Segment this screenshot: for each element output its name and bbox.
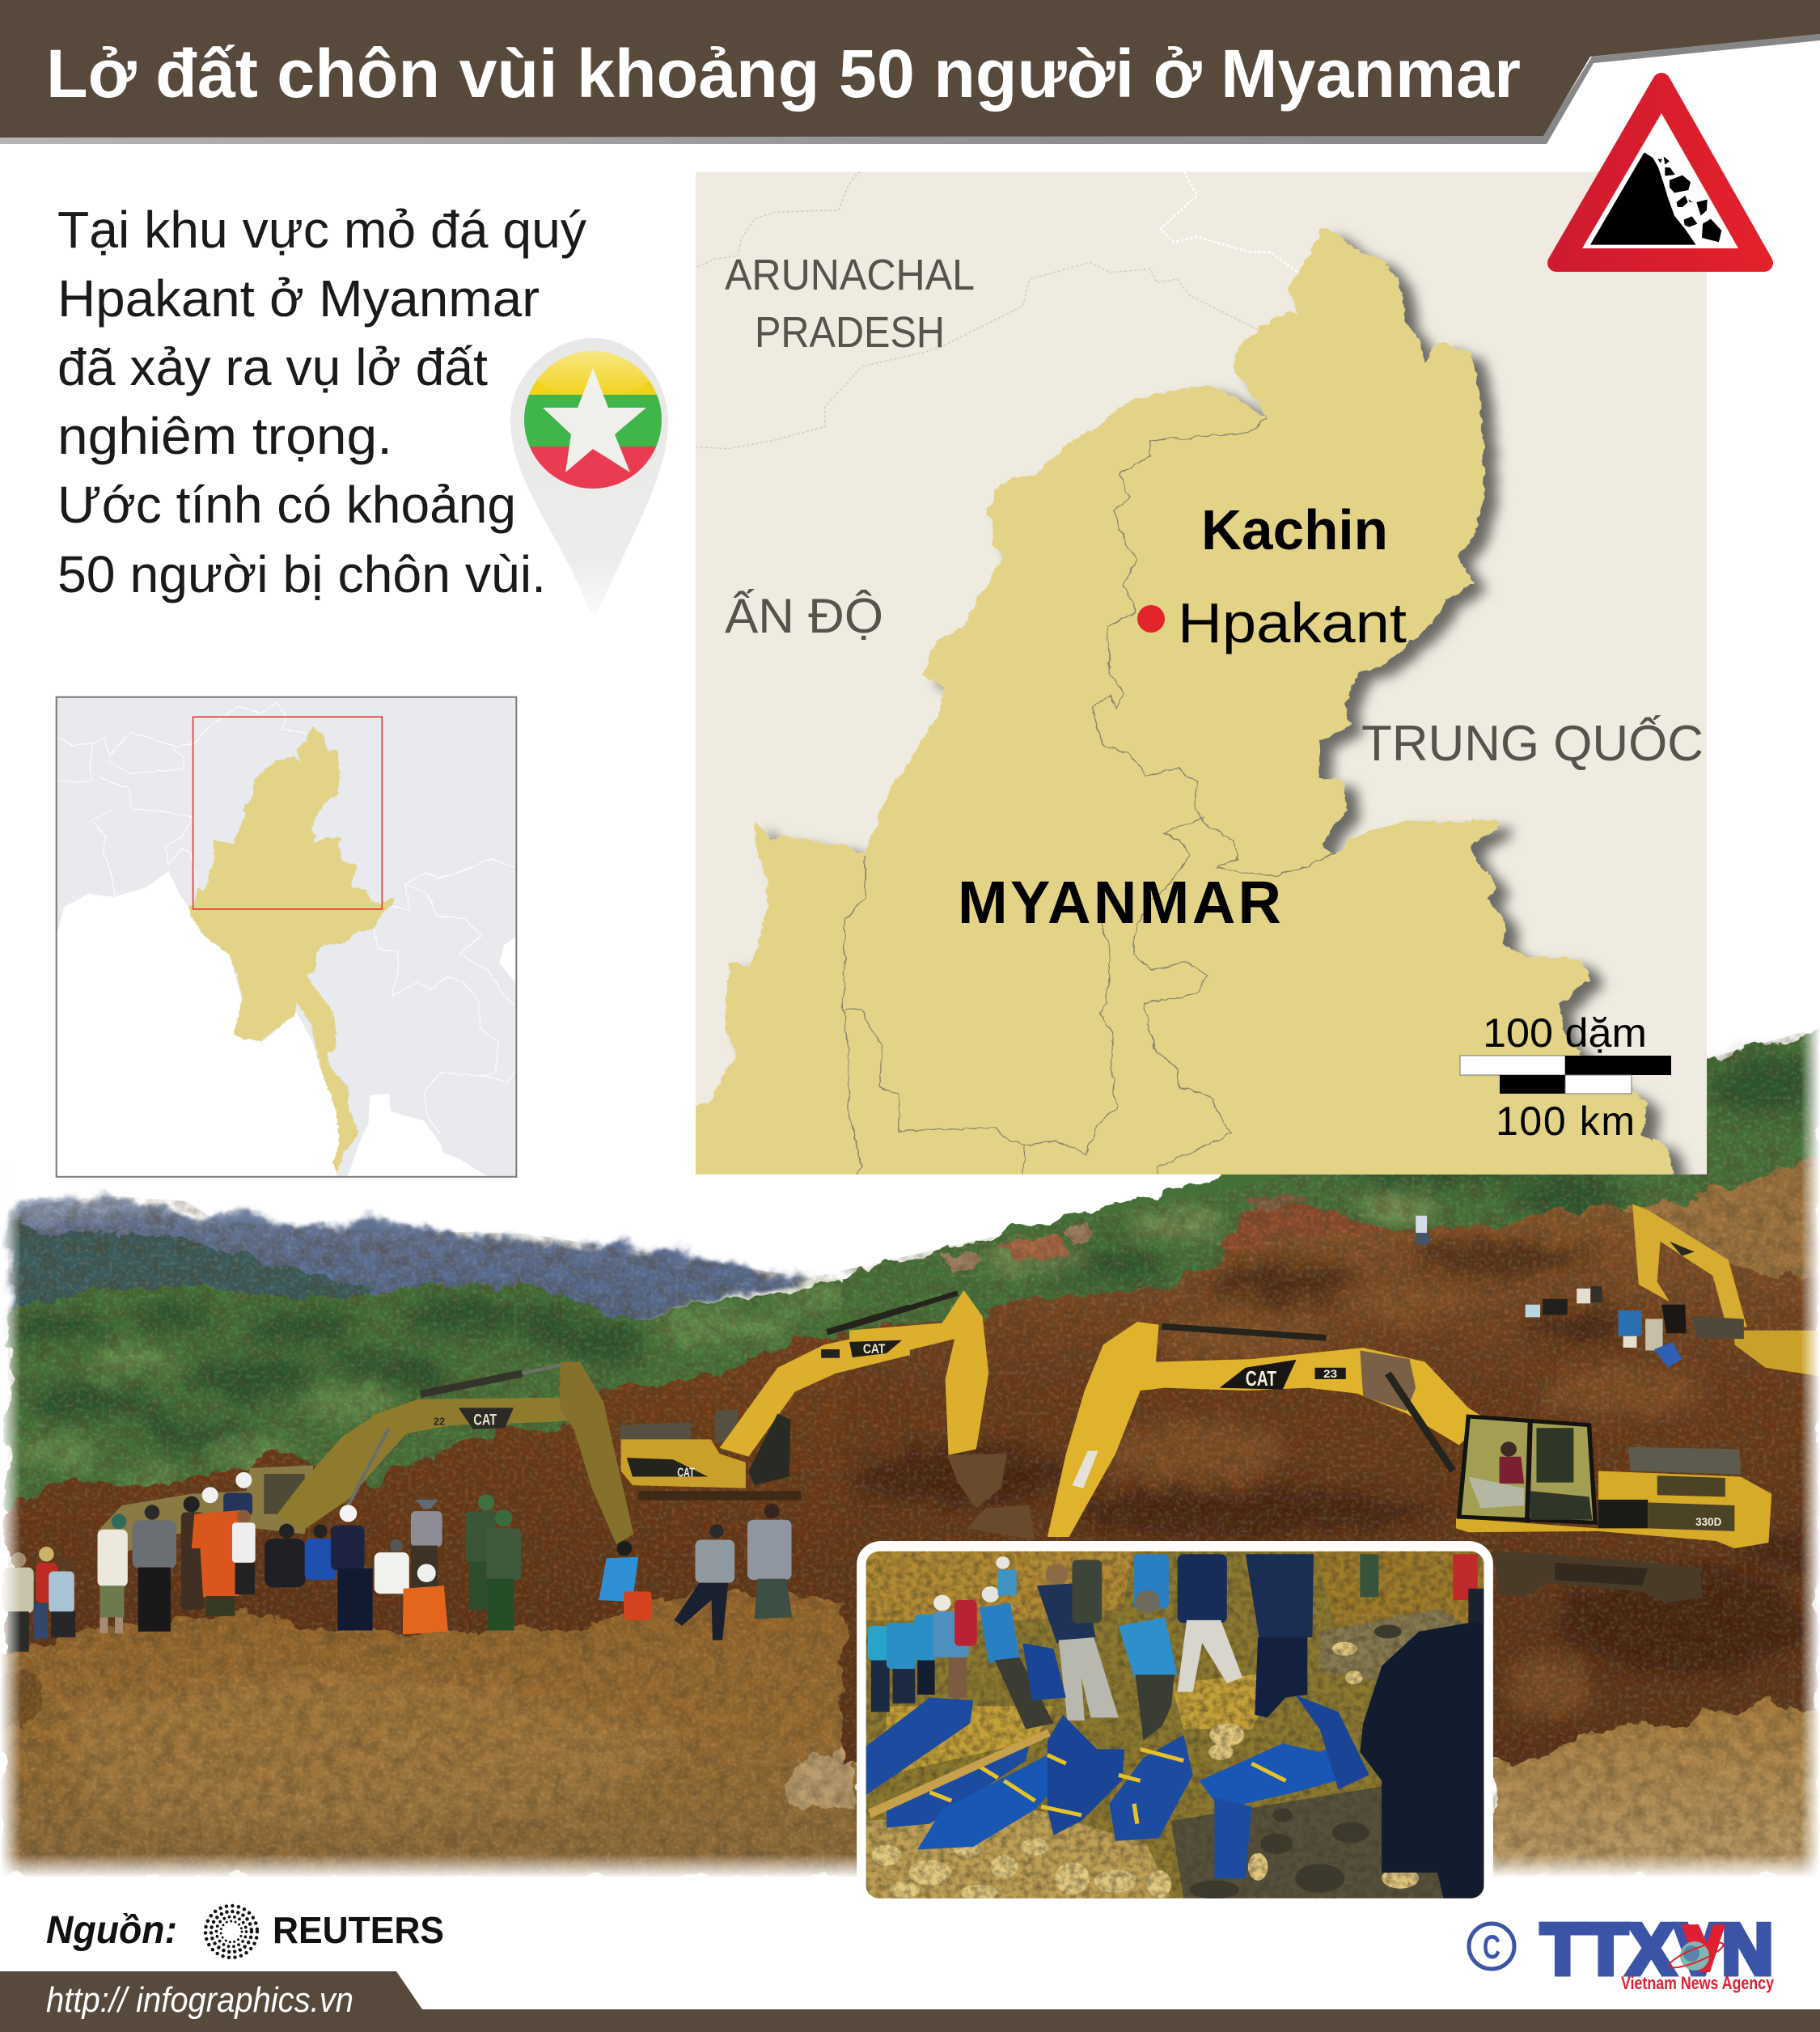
intro text block: Ước tính có khoảng bbox=[57, 476, 516, 534]
label: Kachin: Kachin bbox=[1201, 498, 1388, 561]
banner shadow bbox=[0, 34, 1820, 144]
label: Arunachal Pradesh: ARUNACHAL bbox=[725, 251, 975, 299]
inset texture bbox=[866, 1552, 1484, 1899]
neighbouring dashed borders bbox=[696, 171, 1297, 449]
scale bar: 100 dặm bbox=[1483, 1010, 1647, 1056]
scale bar bbox=[1460, 1010, 1671, 1144]
footer bar bbox=[0, 1971, 1820, 2032]
copyright symbol bbox=[1469, 1924, 1514, 1969]
scale bar: 100 km bbox=[1496, 1099, 1635, 1144]
photo terrain layers bbox=[0, 1029, 1820, 1878]
upper right soil bank bbox=[1617, 1155, 1820, 1322]
locator frame bbox=[57, 697, 516, 1177]
label: Ấn Độ: ẤN ĐỘ bbox=[725, 589, 883, 643]
inset man in foreground bbox=[1360, 1620, 1484, 1899]
label: Arunachal Pradesh: PRADESH bbox=[755, 308, 945, 357]
excavator: yellow middle machine: CAT bbox=[865, 1342, 885, 1356]
Myanmar landmass bbox=[681, 229, 1677, 1187]
locator land background bbox=[57, 698, 516, 1176]
excavator: large yellow CAT 330D: 23 bbox=[1323, 1368, 1337, 1381]
source line bbox=[46, 1906, 444, 1958]
locator borders bbox=[57, 702, 516, 1133]
excavator: far top right bbox=[1632, 1204, 1820, 1376]
region borders bbox=[843, 418, 1335, 1175]
excavator: olive left machine: CAT bbox=[473, 1412, 497, 1429]
copyright symbol: C bbox=[1483, 1928, 1500, 1966]
main dark soil bbox=[843, 1206, 1820, 1763]
icon: falling rocks warning sign bbox=[1556, 82, 1764, 263]
title: Lở đất chôn vùi khoảng 50 người ở Myanmar bbox=[46, 36, 1521, 112]
intro text block: đã xảy ra vụ lở đất bbox=[57, 338, 488, 396]
label: Trung Quốc: TRUNG QUỐC bbox=[1361, 716, 1704, 772]
banner shape bbox=[0, 0, 1820, 138]
marker: Hpakant dot bbox=[1137, 605, 1165, 633]
intro text block: Tại khu vực mỏ đá quý bbox=[57, 201, 586, 259]
excavator: yellow middle machine: CAT bbox=[677, 1467, 695, 1480]
excavator: large yellow CAT 330D bbox=[1048, 1322, 1771, 1603]
inset blue bags bbox=[866, 1643, 1369, 1878]
label: Arunachal Pradesh bbox=[725, 251, 975, 357]
intro text block bbox=[57, 201, 586, 603]
photo edge fades bbox=[0, 1003, 1820, 1909]
inset ground bbox=[866, 1552, 1484, 1899]
main map: Kachin and Hpakant bbox=[681, 171, 1707, 1187]
foreground dirt bbox=[0, 1589, 859, 1878]
excavator: olive left machine bbox=[98, 1362, 633, 1560]
photo left half: mountains, forest and soil bbox=[0, 1197, 910, 1878]
excavator: yellow middle machine: CAT bbox=[863, 1341, 886, 1357]
excavator: olive left machine: 22 bbox=[434, 1416, 445, 1428]
workers on the far hillside bbox=[1416, 1216, 1682, 1368]
inset locator map bbox=[57, 697, 516, 1177]
inset rocks bbox=[866, 1810, 1171, 1899]
dark near mountain bbox=[9, 1221, 371, 1322]
intro text block: 50 người bị chôn vùi. bbox=[57, 545, 546, 603]
TTXVN logo bbox=[1469, 1909, 1775, 1993]
title banner bbox=[0, 0, 1820, 144]
red V and globe bbox=[1667, 1924, 1725, 1972]
intro text block: nghiêm trọng. bbox=[57, 407, 392, 465]
label: Myanmar: MYANMAR bbox=[958, 869, 1281, 936]
label: Hpakant: Hpakant bbox=[1178, 591, 1407, 654]
reddish brown soil mound bbox=[6, 1331, 910, 1706]
excavator: large yellow CAT 330D: 330D bbox=[1695, 1515, 1721, 1528]
source label: Nguồn: bbox=[46, 1909, 177, 1952]
Myanmar on locator bbox=[188, 727, 395, 1174]
map background bbox=[696, 171, 1707, 1175]
inset crowd bbox=[868, 1554, 1478, 1741]
lower right pale dirt bbox=[1493, 1706, 1820, 1878]
right hillside vegetation bbox=[843, 1029, 1820, 1362]
intro text block: Hpakant ở Myanmar bbox=[57, 269, 540, 328]
agency letters: TTXVN bbox=[1541, 1909, 1773, 1989]
landscape photo: rescue excavators on landslide bbox=[0, 1003, 1820, 1909]
excavator: yellow middle machine bbox=[620, 1290, 1035, 1540]
green forest bbox=[6, 1262, 910, 1534]
map labels bbox=[725, 251, 1704, 936]
red focus rectangle bbox=[193, 717, 382, 909]
website address: http:// infographics.vn bbox=[46, 1980, 353, 2020]
photo right half: hillside and soil bbox=[843, 1029, 1820, 1878]
inset photo: blue body bags bbox=[857, 1541, 1493, 1908]
locator seas bbox=[57, 871, 345, 1177]
excavator: large yellow CAT 330D: CAT bbox=[1246, 1367, 1276, 1391]
red soil patches and huts bbox=[1215, 1207, 1419, 1255]
soil and forest texture bbox=[0, 1019, 1820, 1885]
rescuers on the ridge bbox=[3, 1472, 792, 1652]
blue mountains bbox=[6, 1197, 806, 1325]
icon: Reuters dotted logo bbox=[205, 1906, 257, 1958]
agency name: Vietnam News Agency bbox=[1621, 1973, 1775, 1993]
Reuters wordmark: REUTERS bbox=[273, 1909, 444, 1951]
icon: Myanmar flag map pin bbox=[510, 338, 671, 615]
